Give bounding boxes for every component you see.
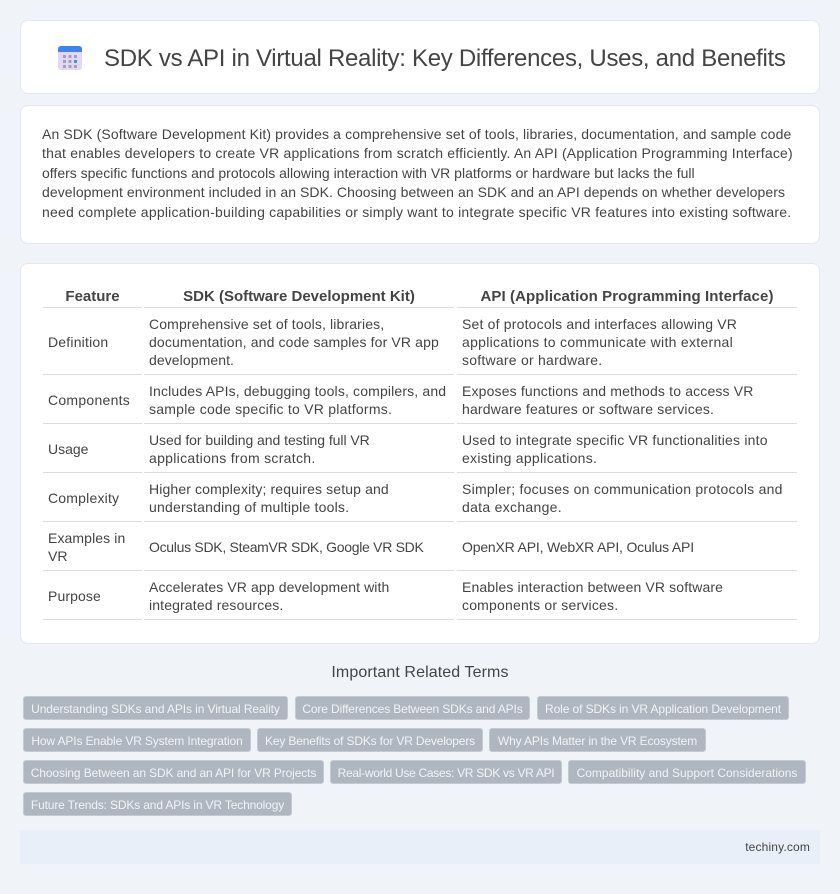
related term tags: Choosing Between an SDK and an API for VR Projects <box>31 766 316 780</box>
row: definition: Set of protocols and interfaces allowing VR <box>462 316 737 332</box>
row: definition <box>48 316 737 368</box>
row: examples in VR: VR <box>48 548 67 564</box>
related term tags: Real-world Use Cases: VR SDK vs VR API <box>338 766 554 780</box>
row: complexity: Complexity <box>48 490 119 506</box>
text block: introduction <box>42 126 793 220</box>
row: usage <box>48 432 768 466</box>
title: SDK vs API in Virtual Reality: Key Differences, Uses, and Benefits <box>104 45 786 72</box>
row: usage: applications from scratch. <box>149 450 316 466</box>
related term tags: Future Trends: SDKs and APIs in VR Technology <box>31 798 284 812</box>
text block: introduction: offers specific functions and protocols allowing interaction with VR platforms or hardware but lacks the full <box>42 165 695 181</box>
related term tags <box>23 696 806 816</box>
related term tags: Understanding SDKs and APIs in Virtual Reality <box>31 702 280 716</box>
row: components <box>48 383 754 417</box>
row: usage: existing applications. <box>462 450 597 466</box>
row: usage: Usage <box>48 441 88 457</box>
table header: SDK (Software Development Kit) <box>183 288 415 305</box>
heading: important related terms: Important Related Terms <box>331 664 509 681</box>
text block: introduction: need complete application-building capabilities or simply want to integrate specific VR features into existing software. <box>42 204 791 220</box>
row: purpose <box>48 579 723 613</box>
related term tags: Role of SDKs in VR Application Development <box>545 702 781 716</box>
row: purpose: Enables interaction between VR software <box>462 579 723 595</box>
row: complexity: Simpler; focuses on communication protocols and <box>462 481 783 497</box>
row: components: Exposes functions and methods to access VR <box>462 383 754 399</box>
related term tags: Compatibility and Support Considerations <box>577 766 797 780</box>
row: definition: Definition <box>48 334 108 350</box>
row: purpose: Accelerates VR app development with <box>149 579 389 595</box>
row: definition: applications to communicate with external <box>462 334 733 350</box>
related term tags: Why APIs Matter in the VR Ecosystem <box>498 734 697 748</box>
row: purpose: components or services. <box>462 597 618 613</box>
table header <box>65 288 774 305</box>
row: complexity: understanding of multiple tools. <box>149 499 349 515</box>
footer <box>20 830 820 864</box>
row: complexity <box>48 481 783 515</box>
row: components: Includes APIs, debugging tools, compilers, and <box>149 383 446 399</box>
row: examples in VR: OpenXR API, WebXR API, Oculus API <box>462 539 694 555</box>
text block: introduction: An SDK (Software Development Kit) provides a comprehensive set of tools, libraries, documentation, and sample code <box>42 126 791 142</box>
row: definition: Comprehensive set of tools, libraries, <box>149 316 384 332</box>
related term tags: How APIs Enable VR System Integration <box>31 734 243 748</box>
row: examples in VR: Oculus SDK, SteamVR SDK, Google VR SDK <box>149 539 424 555</box>
row: examples in VR: Examples in <box>48 530 125 546</box>
related term tags: Core Differences Between SDKs and APIs <box>302 702 523 716</box>
row: components: sample code specific to VR platforms. <box>149 401 392 417</box>
row: purpose: integrated resources. <box>149 597 283 613</box>
row: usage: Used to integrate specific VR functionalities into <box>462 432 768 448</box>
row: components: Components <box>48 392 130 408</box>
table header: Feature <box>65 288 120 305</box>
row: purpose: Purpose <box>48 588 101 604</box>
row: definition: development. <box>149 352 234 368</box>
footer source text: techiny.com <box>745 840 810 854</box>
row: examples in VR <box>48 530 694 564</box>
row: components: hardware features or software services. <box>462 401 714 417</box>
text block: introduction: that enables developers to create VR applications from scratch efficiently. An API (Application Programming Interface) <box>42 145 793 161</box>
row: complexity: Higher complexity; requires setup and <box>149 481 389 497</box>
row: definition: software or hardware. <box>462 352 602 368</box>
related term tags: Key Benefits of SDKs for VR Developers <box>265 734 475 748</box>
panel: comparison table <box>20 263 820 644</box>
row: complexity: data exchange. <box>462 499 562 515</box>
row: definition: documentation, and code samples for VR app <box>149 334 439 350</box>
row: usage: Used for building and testing full VR <box>149 432 370 448</box>
panel: introduction <box>20 105 820 244</box>
panel: header <box>20 20 820 94</box>
text block: introduction: development environment included in an SDK. Choosing between an SDK and an API depends on whether developers <box>42 184 785 200</box>
icon: calendar <box>58 46 82 70</box>
table header: API (Application Programming Interface) <box>480 288 774 305</box>
